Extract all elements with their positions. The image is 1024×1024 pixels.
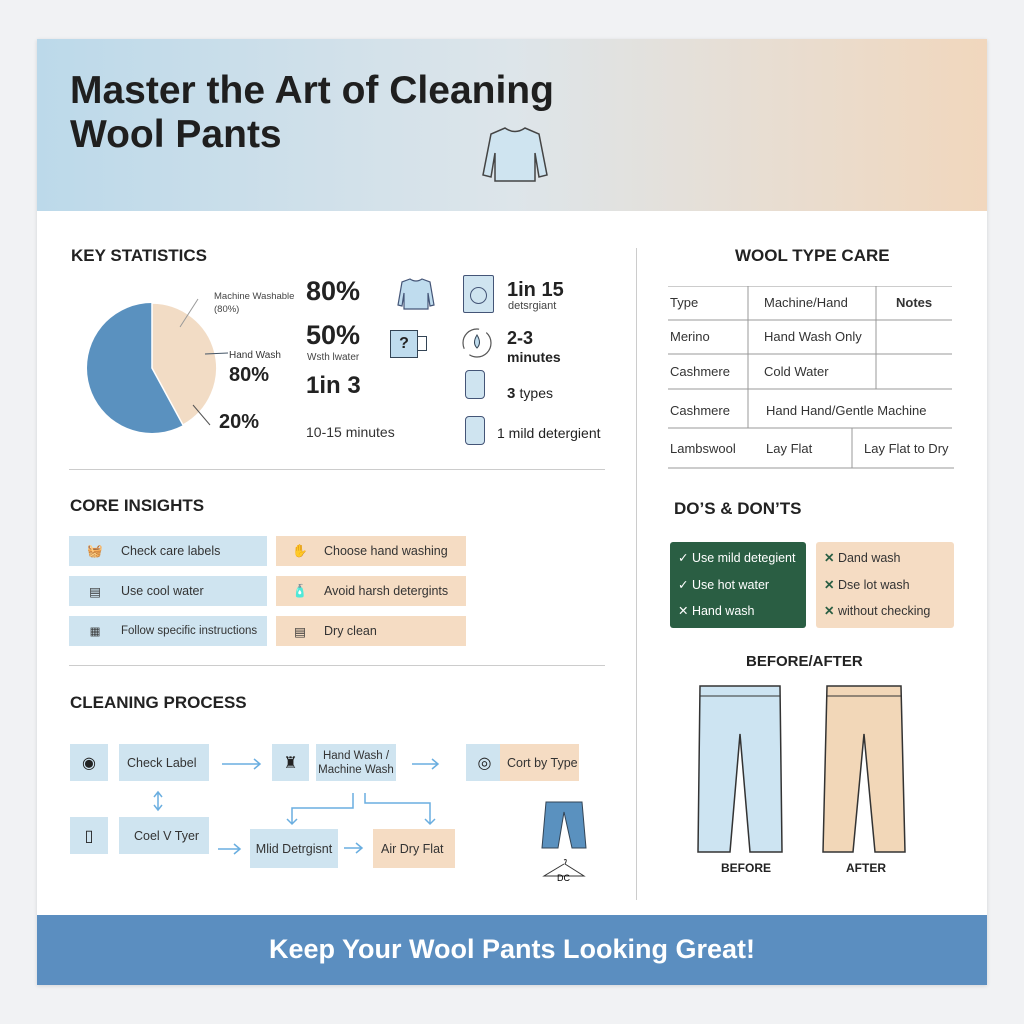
do's & don'ts heading: DO’S & DON’TS — [674, 499, 802, 518]
pants before — [697, 685, 783, 853]
footer banner — [37, 915, 987, 985]
don'ts box: ✕ without checking — [824, 604, 930, 618]
insights grid — [69, 536, 466, 646]
icon: washer — [463, 275, 494, 313]
do's box: ✕ Hand wash — [678, 604, 754, 618]
flowchart — [70, 744, 586, 883]
wool table: Cold Water — [764, 364, 829, 379]
icon: bottle 2 — [465, 416, 485, 445]
insights grid: Follow specific instructions — [121, 625, 257, 637]
text: 2-3 — [507, 328, 533, 348]
pie labels — [214, 291, 294, 315]
pie labels: (80%) — [214, 304, 239, 315]
do's box: ✓ Use hot water — [678, 578, 769, 592]
insights grid: Choose hand washing — [324, 544, 448, 558]
flowchart: Cort by Type — [507, 756, 578, 770]
flowchart: ◉ — [82, 754, 96, 772]
text: Wsth lwater — [307, 352, 359, 363]
icon: bottle — [465, 370, 485, 399]
icon: jeans and hanger: DC — [557, 873, 570, 883]
don'ts box: ✕ Dand wash — [824, 551, 900, 565]
wool table: Notes — [896, 295, 932, 310]
insights grid: ▤ — [89, 584, 101, 598]
wool table: Machine/Hand — [764, 295, 848, 310]
flowchart: ◎ — [478, 754, 491, 772]
cleaning process heading: CLEANING PROCESS — [70, 693, 247, 712]
wool table: Lay Flat to Dry — [864, 441, 949, 456]
title: Master the Art of Cleaning — [70, 69, 554, 112]
icon: sweater small — [397, 278, 435, 310]
flowchart: Coel V Tyer — [134, 828, 199, 842]
icon: water cycle — [462, 328, 492, 358]
insights grid: 🧴 — [292, 584, 308, 598]
icon: question — [390, 330, 418, 358]
wool table: Lay Flat — [766, 441, 812, 456]
don'ts box: ✕ Dse lot wash — [824, 578, 910, 592]
flowchart: Mlid Detrgisnt — [256, 842, 332, 856]
wool table: Cashmere — [670, 364, 730, 379]
wool type care heading: WOOL TYPE CARE — [735, 246, 890, 265]
icon: question: ? — [399, 335, 409, 352]
text: BEFORE — [721, 861, 771, 875]
do's box: ✓ Use mild detegient — [678, 551, 795, 565]
stats column: 80% — [306, 276, 360, 306]
do's box — [670, 542, 806, 628]
text: 1in 15 — [507, 279, 564, 301]
pie chart — [87, 298, 228, 433]
title — [70, 69, 554, 156]
pie labels: Machine Washable — [214, 291, 294, 302]
wool table: Type — [670, 295, 698, 310]
insights grid: Check care labels — [121, 544, 220, 558]
title: Wool Pants — [70, 113, 282, 156]
flowchart: ▯ — [85, 828, 93, 844]
wool table: Hand Wash Only — [764, 329, 862, 344]
wool table — [668, 286, 954, 468]
text: 1 mild detergient — [497, 425, 601, 441]
text: 50% — [306, 320, 360, 350]
flowchart: Hand Wash / — [323, 750, 389, 762]
insights grid: ▦ — [90, 626, 100, 638]
key statistics heading: KEY STATISTICS — [71, 246, 207, 265]
icon: jeans and hanger — [541, 802, 586, 883]
text: 80% — [229, 364, 269, 386]
flowchart: Check Label — [127, 756, 196, 770]
header banner — [37, 39, 987, 211]
text: 10-15 minutes — [306, 424, 395, 440]
text: 20% — [219, 411, 259, 433]
wool table: Merino — [670, 329, 710, 344]
footer banner: Keep Your Wool Pants Looking Great! — [269, 934, 755, 964]
flowchart: Machine Wash — [318, 764, 394, 776]
text: Hand Wash — [229, 350, 281, 361]
core insights heading: CORE INSIGHTS — [70, 496, 204, 515]
flowchart: Air Dry Flat — [381, 842, 444, 856]
wool table: Cashmere — [670, 403, 730, 418]
flowchart: ♜ — [283, 754, 298, 772]
text: 3 types — [507, 385, 553, 402]
before/after heading: BEFORE/AFTER — [746, 653, 863, 670]
wool table: Lambswool — [670, 441, 736, 456]
text: detsrgiant — [508, 300, 556, 312]
insights grid: ✋ — [292, 544, 308, 558]
insights grid: ▤ — [294, 624, 306, 638]
insights grid: Dry clean — [324, 624, 377, 638]
text: minutes — [507, 349, 561, 365]
pants after — [822, 685, 906, 853]
wool table: Hand Hand/Gentle Machine — [766, 403, 926, 418]
icon: sweater — [482, 127, 548, 182]
text: 1in 3 — [306, 372, 361, 399]
don'ts box — [816, 542, 954, 628]
insights grid: Use cool water — [121, 584, 204, 598]
insights grid: 🧺 — [87, 544, 103, 558]
text: AFTER — [846, 861, 886, 875]
insights grid: Avoid harsh detergints — [324, 584, 448, 598]
